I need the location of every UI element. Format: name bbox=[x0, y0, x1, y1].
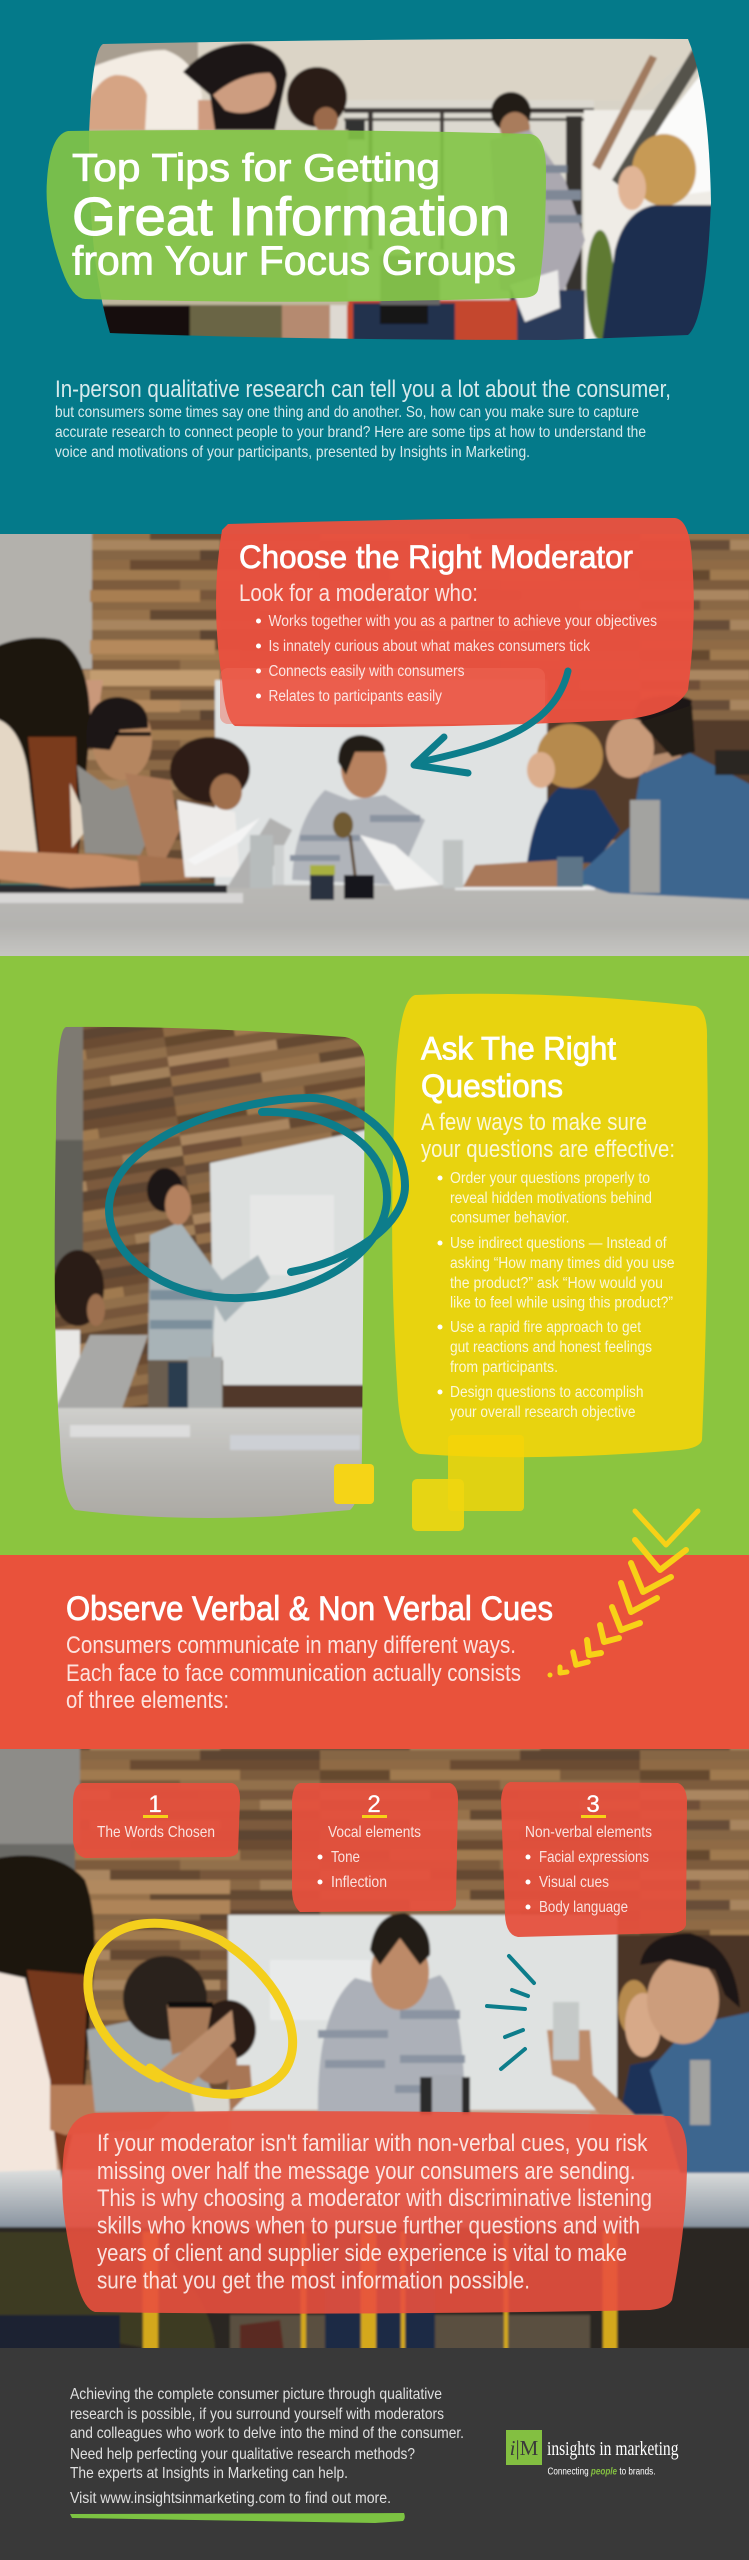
heading: Questions bbox=[421, 1068, 563, 1104]
logo: insights in marketing bbox=[506, 2430, 678, 2478]
decorative yellow squares bbox=[334, 1435, 524, 1531]
intro paragraph: accurate research to connect people to your brand? Here are some tips at how to understand the bbox=[55, 424, 646, 441]
element 3: non-verbal elements bbox=[501, 1782, 687, 1937]
subheading: your questions are effective: bbox=[421, 1136, 675, 1163]
section: teal header background bbox=[0, 0, 749, 534]
bullet list: Connects easily with consumers bbox=[268, 663, 465, 680]
man glasses bbox=[77, 765, 150, 855]
panel: ask the right questions bbox=[392, 994, 708, 1457]
intro text: three elements: Each face to face communication actually consists bbox=[66, 1660, 521, 1687]
logo mark bbox=[506, 2430, 542, 2465]
callout text: sure that you get the most information possible. bbox=[97, 2268, 530, 2295]
logo: insights in marketing: i|M bbox=[510, 2436, 539, 2460]
bullet list: asking “How many times did you use bbox=[450, 1255, 675, 1272]
element 2: vocal elements: Tone bbox=[331, 1849, 360, 1866]
yellow panel shape bbox=[392, 994, 708, 1457]
bullet list: Design questions to accomplish bbox=[450, 1384, 644, 1401]
callout text: skills who knows when to pursue further questions and with bbox=[97, 2212, 640, 2240]
heading: Choose the Right Moderator bbox=[239, 539, 633, 575]
element 3: non-verbal elements: Facial expressions bbox=[539, 1849, 649, 1866]
bullet list: Is innately curious about what makes consumers tick bbox=[268, 638, 590, 655]
man glasses bbox=[87, 2020, 225, 2112]
section: green background bbox=[0, 956, 749, 1555]
bullet list: Use indirect questions — Instead of bbox=[450, 1235, 667, 1252]
footer background bbox=[0, 2348, 749, 2560]
intro paragraph: voice and motivations of your participants, presented by Insights in Marketing. bbox=[55, 444, 530, 461]
title text: Great Information bbox=[72, 187, 510, 247]
title text: from Your Focus Groups bbox=[72, 238, 516, 284]
chevrons: yellow trail bbox=[548, 1511, 698, 1678]
bullet list: like to feel while using this product?” bbox=[450, 1294, 673, 1312]
icon: teal hand-drawn circle bbox=[109, 1098, 405, 1298]
tagline: Connecting people to brands. bbox=[548, 2466, 656, 2478]
callout text: missing over half the message your consumers are sending. bbox=[97, 2158, 636, 2185]
element 1: the words chosen bbox=[73, 1783, 240, 1858]
bullet list: reveal hidden motivations behind bbox=[450, 1190, 652, 1207]
logo name: insights in marketing bbox=[547, 2438, 678, 2460]
subheading bbox=[421, 1109, 675, 1163]
intro paragraph: but consumers some times say one thing and do another. So, how can you make sure to capture bbox=[55, 404, 639, 421]
intro text: three elements: Consumers communicate in many different ways. bbox=[66, 1632, 516, 1659]
intro text: three elements bbox=[66, 1632, 521, 1714]
element 2: vocal elements: Vocal elements bbox=[328, 1824, 421, 1841]
woman curly bbox=[177, 800, 240, 877]
element 3: non-verbal elements: Non-verbal elements bbox=[525, 1824, 652, 1841]
lighter lower band bbox=[220, 668, 545, 724]
arrow: teal pointing to moderator bbox=[414, 671, 568, 773]
bullet list: Relates to participants easily bbox=[268, 688, 442, 705]
woman left bbox=[0, 1856, 95, 2090]
green banner shape bbox=[47, 130, 546, 302]
callout: moderator non-verbal cues bbox=[62, 2111, 687, 2314]
subheading: Look for a moderator who: bbox=[239, 580, 478, 607]
man right bbox=[491, 92, 531, 132]
title banner bbox=[47, 130, 546, 302]
icon: teal emphasis dashes bbox=[487, 1956, 534, 2069]
bullet list: from participants. bbox=[450, 1359, 558, 1376]
callout text: If your moderator isn't familiar with non-verbal cues, you risk bbox=[97, 2130, 648, 2157]
element 3: non-verbal elements: 3 bbox=[586, 1791, 600, 1818]
bullet list: Works together with you as a partner to achieve your objectives bbox=[268, 613, 657, 630]
panel: choose the right moderator bbox=[216, 518, 694, 727]
photo: man presenting at whiteboard bbox=[54, 1026, 365, 1518]
heading bbox=[421, 1030, 616, 1104]
yellow chair legs bbox=[143, 2232, 158, 2360]
woman left bbox=[84, 679, 103, 716]
intro paragraph bbox=[55, 376, 671, 461]
element 2: vocal elements: Inflection bbox=[331, 1874, 387, 1891]
element 1: the words chosen: The Words Chosen bbox=[97, 1824, 215, 1841]
heading: Ask The Right bbox=[421, 1030, 616, 1066]
bullet list bbox=[438, 1170, 675, 1421]
photo: team at conference table bbox=[0, 522, 749, 968]
heading: observe verbal and non verbal cues: Observe Verbal & Non Verbal Cues bbox=[66, 1590, 553, 1628]
red translucent panel bbox=[62, 2111, 687, 2314]
bullet list: the product?” ask “How would you bbox=[450, 1275, 663, 1292]
blonde woman bbox=[537, 724, 603, 788]
callout text bbox=[97, 2130, 652, 2295]
right man bbox=[634, 696, 693, 722]
footer text: Achieving the complete consumer picture through qualitative bbox=[70, 2386, 442, 2403]
green brush underline bbox=[70, 2513, 405, 2523]
center man bbox=[292, 790, 425, 885]
bullet list bbox=[256, 613, 657, 705]
bullet list: Order your questions properly to bbox=[450, 1170, 650, 1187]
callout text: This is why choosing a moderator with discriminative listening bbox=[97, 2185, 652, 2212]
footer text: research is possible, if you surround yourself with moderators bbox=[70, 2406, 444, 2423]
right side people bbox=[618, 1980, 650, 2036]
footer text: Visit www.insightsinmarketing.com to find out more. bbox=[70, 2490, 391, 2507]
woman curly bbox=[287, 67, 347, 127]
woman blonde bbox=[632, 134, 696, 206]
section: red observe cues background bbox=[0, 1555, 749, 1749]
element 2: vocal elements bbox=[292, 1783, 458, 1912]
bullet list: Use a rapid fire approach to get bbox=[450, 1319, 642, 1336]
title text bbox=[72, 147, 516, 284]
callout text: years of client and supplier side experience is vital to make bbox=[97, 2240, 627, 2267]
icon: yellow hand-drawn circle bbox=[88, 1923, 293, 2094]
element 1: the words chosen: 1 bbox=[148, 1791, 162, 1818]
bullet list: your overall research objective bbox=[450, 1404, 636, 1421]
center man bbox=[318, 1975, 465, 2115]
footer text: and colleagues who work to delve into the mind of the consumer. bbox=[70, 2425, 464, 2442]
woman left bbox=[91, 48, 202, 130]
panels: three communication elements bbox=[73, 1782, 687, 1937]
subheading: A few ways to make sure bbox=[421, 1109, 647, 1136]
footer text: The experts at Insights in Marketing can help. bbox=[70, 2465, 348, 2482]
bullet list: gut reactions and honest feelings bbox=[450, 1339, 652, 1356]
element 3: non-verbal elements: Visual cues bbox=[539, 1874, 609, 1891]
bullet list: consumer behavior. bbox=[450, 1210, 570, 1226]
element 2: vocal elements: 2 bbox=[367, 1791, 381, 1818]
footer text: Need help perfecting your qualitative research methods? bbox=[70, 2446, 415, 2463]
intro text: three elements: of three elements: bbox=[66, 1687, 229, 1714]
element 3: non-verbal elements: Body language bbox=[539, 1899, 628, 1916]
photo: laughing team bbox=[0, 1737, 749, 2360]
red panel shape bbox=[216, 518, 694, 727]
legs and chair bbox=[102, 304, 192, 336]
title text: Top Tips for Getting bbox=[72, 147, 440, 190]
footer text bbox=[70, 2386, 464, 2507]
hero photo: focus group standing around bbox=[89, 38, 711, 340]
